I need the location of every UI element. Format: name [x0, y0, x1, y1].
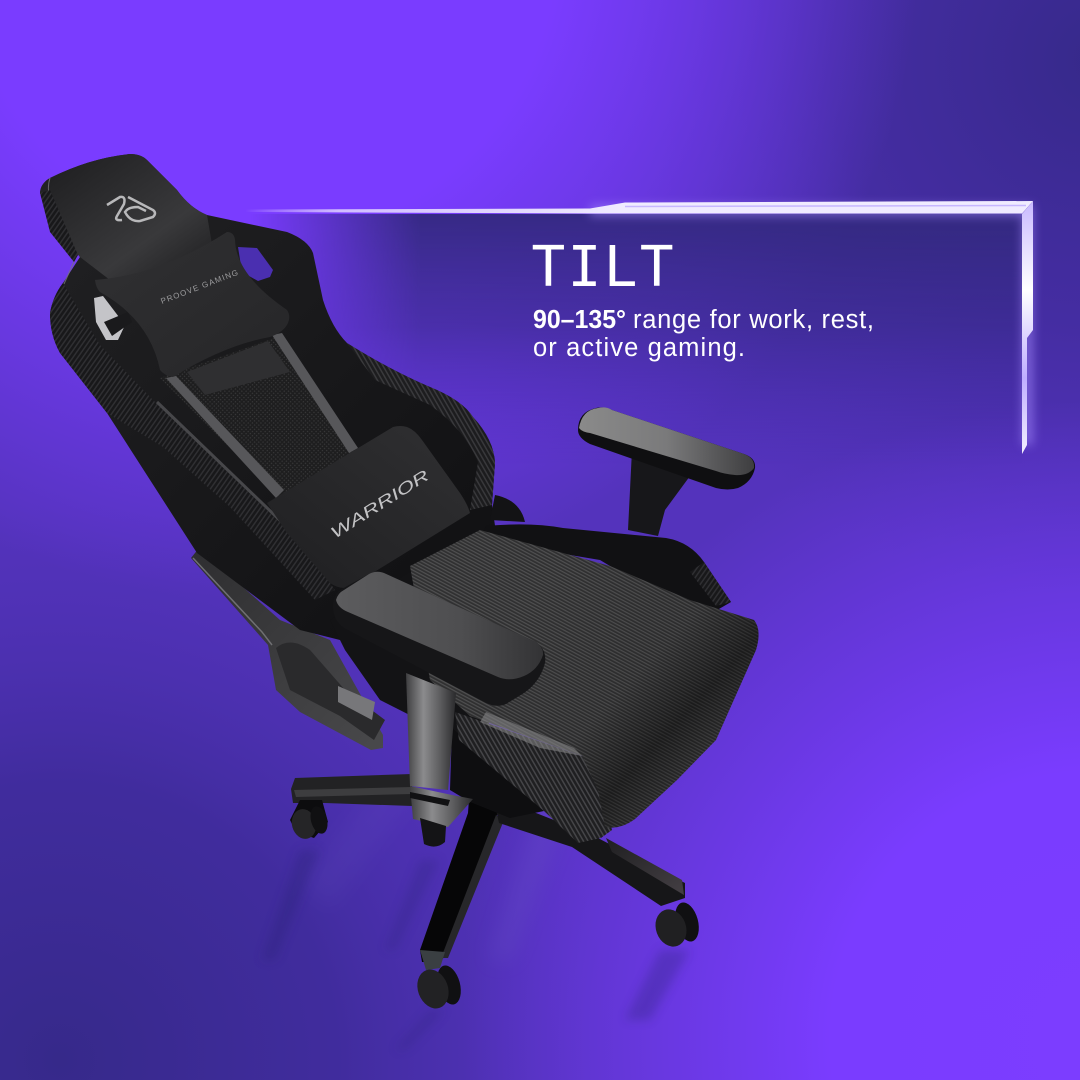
- backrest: [40, 154, 500, 640]
- neck pillow: [95, 232, 289, 377]
- rear bolster: [480, 524, 731, 620]
- seat cushion mesh: [410, 530, 759, 828]
- front armrest: [333, 572, 545, 706]
- dark underside joining seat to base: [450, 728, 544, 818]
- description text: [533, 306, 874, 362]
- light frame line: [245, 201, 1033, 454]
- right carbon bolster: [347, 343, 495, 510]
- window openings: [238, 247, 273, 281]
- rear armrest: [578, 407, 755, 536]
- left carbon band: [50, 283, 335, 600]
- title: TILT: [532, 235, 676, 300]
- under-seat body behind the armrest: [330, 560, 500, 746]
- lumbar pillow: [267, 426, 470, 588]
- headrest logo: [107, 197, 155, 221]
- description text: 90–135°: [533, 306, 626, 334]
- description text: range for work, rest,: [633, 306, 874, 334]
- rear caster wheel arch: [490, 495, 525, 522]
- base: right leg and caster: [495, 800, 703, 951]
- seat: [330, 524, 759, 843]
- base: left leg and caster: [289, 774, 412, 842]
- headrest: [40, 154, 215, 280]
- panel: dark shade under light frame: [262, 214, 1022, 430]
- seat underside carbon: [455, 712, 612, 843]
- front armrest post: [406, 673, 473, 847]
- lumbar pillow text: WARRIOR: [328, 467, 433, 542]
- base: bottom leg and caster: [412, 785, 504, 1013]
- silver sheen beside armrest: [480, 712, 582, 756]
- back mesh centre: [160, 337, 358, 498]
- neck pillow text: PROOVE GAMING: [159, 268, 239, 306]
- backrest outer shell: [40, 154, 500, 640]
- description text: or active gaming.: [533, 334, 745, 362]
- floor light streaks and shadows: [262, 780, 690, 1050]
- back strips: [166, 376, 284, 498]
- mechanism plate: [191, 548, 385, 750]
- chair: [40, 154, 759, 1013]
